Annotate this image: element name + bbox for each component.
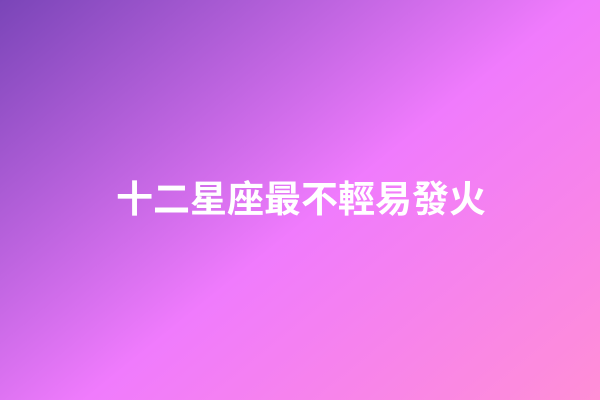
title: 十二星座最不輕易發火 <box>116 179 486 220</box>
